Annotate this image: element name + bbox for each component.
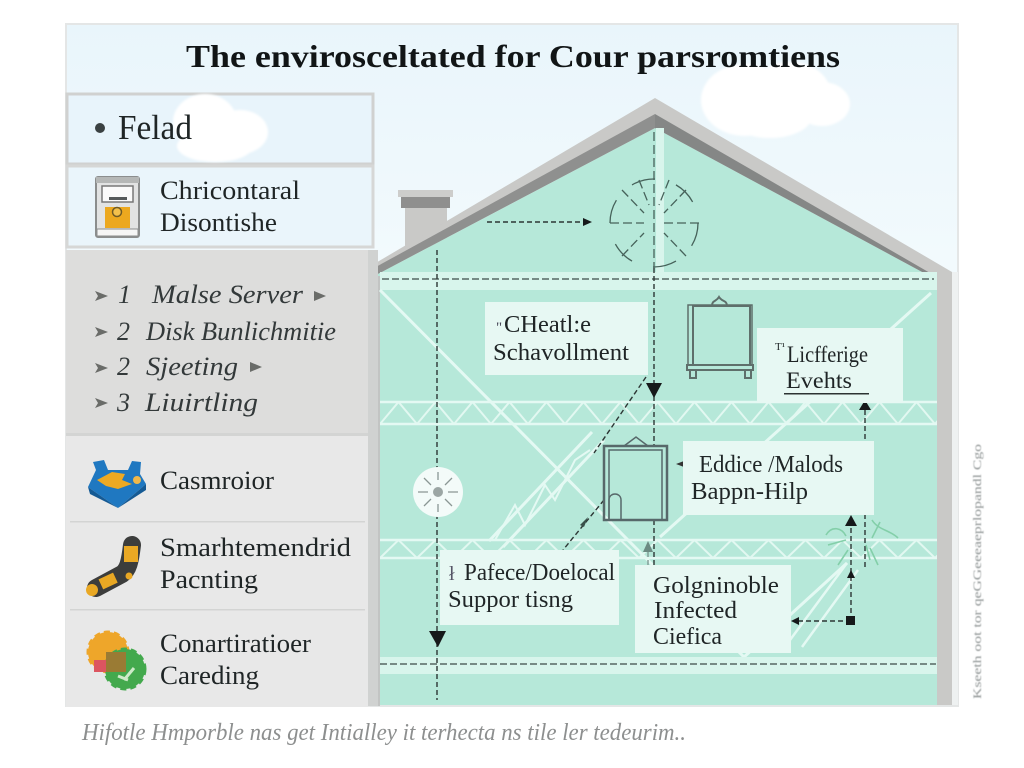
label: Eddice Malods Bappn-Hilp: Eddice /Malods (699, 452, 843, 478)
label: Golgninoble Infected Ciefica: Ciefica (653, 624, 722, 650)
vertical side note: Kseeth oot tor qeGGeeeaeprlopandl Cgo (972, 444, 984, 699)
door frame icon (604, 437, 667, 520)
cloud behind roof (701, 62, 850, 138)
panel row: Chricontaral Disontishe: Chricontaral (160, 176, 300, 205)
title: The enviroscel­tated for Cour parsromtiens (186, 38, 840, 74)
window frame icon (687, 297, 753, 378)
panel row: Casmroior (88, 460, 274, 508)
label: CHeatle Schavollment: Schavollment (493, 340, 629, 366)
label: Pafece Doelocal Suppor tisng: ł (449, 563, 455, 585)
label: Golgninoble Infected Ciefica: Infected (654, 598, 737, 624)
numbered list: Liuirtling (144, 388, 258, 417)
label: Eddice Malods Bappn-Hilp: Bappn-Hilp (691, 479, 808, 505)
green fan icon (826, 520, 898, 565)
panel row: Felad: Felad (118, 108, 192, 147)
panel row: Conartiratioer Careding: Conartiratioer (160, 629, 311, 658)
icon: gears (88, 632, 145, 689)
numbered list: 2 (117, 317, 130, 346)
numbered list (95, 280, 336, 417)
structural bracing (380, 128, 937, 674)
label: Golgninoble Infected Ciefica (635, 565, 791, 653)
numbered list: 1 (118, 280, 131, 309)
panel row: Conartiratioer Careding (88, 629, 311, 690)
numbered list: Sjeeting (146, 352, 238, 381)
caption: Hifotle Hmporble nas get Intialley it terhecta ns tile ler tedeurim.. (81, 720, 686, 746)
panel row: Conartiratioer Careding: Careding (160, 661, 259, 690)
label: Lifferige Evehts: Evehts (786, 368, 852, 393)
dividers (66, 433, 368, 610)
panel row: Casmroior: Casmroior (160, 466, 274, 495)
label: CHeatle Schavollment: " (496, 320, 502, 336)
label: Eddice Malods Bappn-Hilp (683, 441, 874, 515)
house illustration (374, 98, 958, 706)
panel row: Chricontaral Disontishe (67, 166, 373, 247)
background frame (66, 24, 958, 706)
panel row: Smarhtemendrid Pacnting (86, 533, 351, 596)
icon: blue machine (88, 460, 146, 508)
label: Pafece Doelocal Suppor tisng (440, 550, 619, 625)
sun valve icon (413, 467, 463, 517)
panel row: Smarhtemendrid Pacnting: Pacnting (160, 565, 258, 594)
label: Golgninoble Infected Ciefica: Golgninoble (653, 573, 779, 599)
label: Lifferige Evehts (757, 328, 903, 403)
panel row: Felad (67, 94, 373, 164)
ventilation circle (610, 132, 699, 268)
icon: pipe elbow (86, 545, 138, 596)
arrowheads (429, 218, 871, 647)
panel row: Smarhtemendrid Pacnting: Smarhtemendrid (160, 533, 351, 562)
icon: stove cabinet (96, 177, 139, 237)
label: CHeatle Schavollment: CHeatl:e (504, 312, 591, 338)
numbered list: Disk Bunlichmitie (145, 317, 336, 346)
dashed floor lines (380, 279, 936, 664)
label: Pafece Doelocal Suppor tisng: Pafece/Doelocal (464, 560, 615, 586)
roof (374, 98, 958, 706)
label: CHeatle Schavollment (485, 302, 648, 375)
house body (378, 128, 937, 705)
chimney (398, 190, 453, 247)
dashed arrows (437, 222, 865, 700)
numbered list: 2 (117, 352, 130, 381)
label: Lifferige Evehts: T¹ (775, 341, 785, 353)
label: Pafece Doelocal Suppor tisng: Suppor tisng (448, 587, 573, 613)
numbered list: Malse Server (151, 280, 304, 309)
numbered list: 3 (116, 388, 130, 417)
panel row: Chricontaral Disontishe: Disontishe (160, 208, 277, 237)
label: Lifferige Evehts: Licfferige (787, 342, 868, 367)
left panel (66, 94, 378, 707)
